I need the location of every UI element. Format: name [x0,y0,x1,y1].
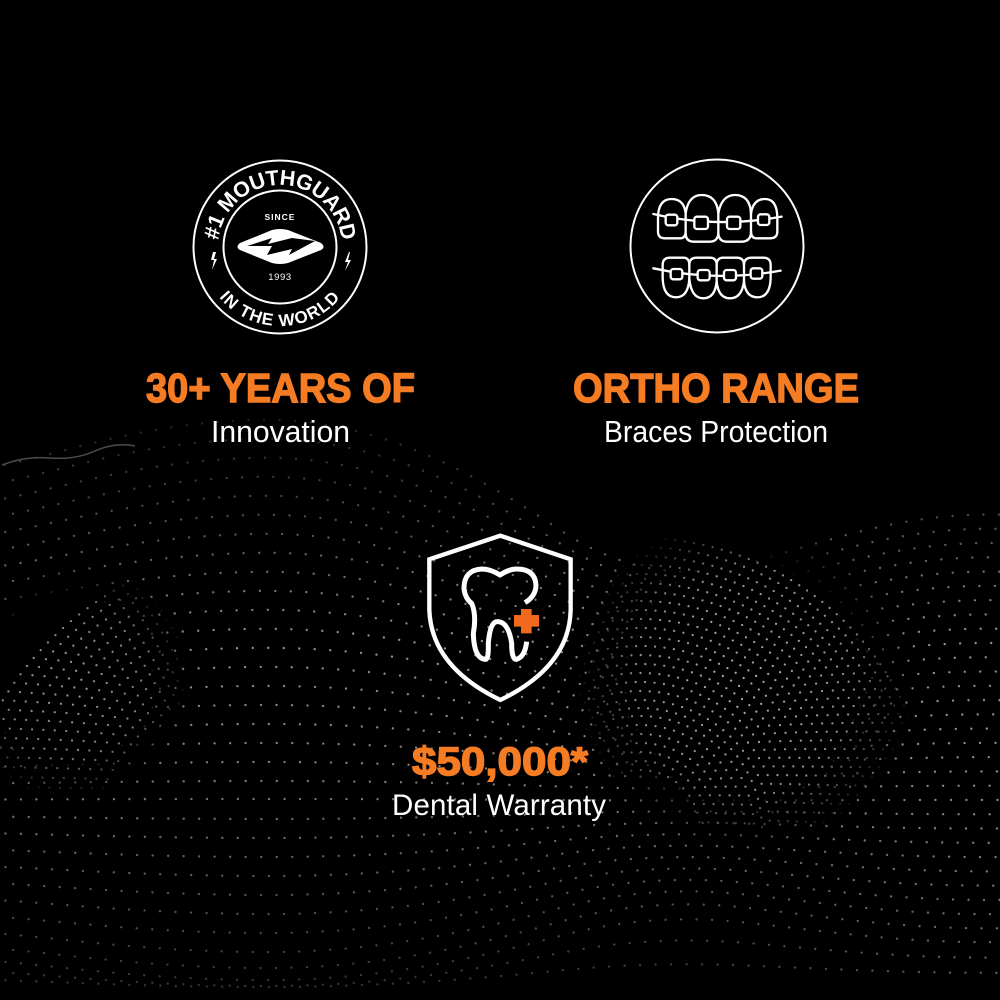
heading: ortho range: ORTHO RANGE [573,365,859,411]
icon: #1 mouthguard badge: 1993 [268,272,292,283]
subheading: braces protection: Braces Protection [604,414,828,449]
heading: $50,000 warranty amount: $50,000* [412,740,588,784]
icon: braces [630,160,804,332]
heading: 30+ years of: 30+ YEARS OF [146,365,415,411]
icon: shield with tooth [429,536,571,700]
icon: #1 mouthguard badge [192,160,368,334]
icon: #1 mouthguard badge: IN THE WORLD [220,290,338,326]
icon: #1 mouthguard badge: #1 MOUTHGUARD [204,170,355,240]
subheading: innovation: Innovation [211,414,350,449]
icon: #1 mouthguard badge: SINCE [265,212,295,222]
subheading: dental warranty: Dental Warranty [392,789,606,822]
background: dotted wave field [0,420,1000,987]
